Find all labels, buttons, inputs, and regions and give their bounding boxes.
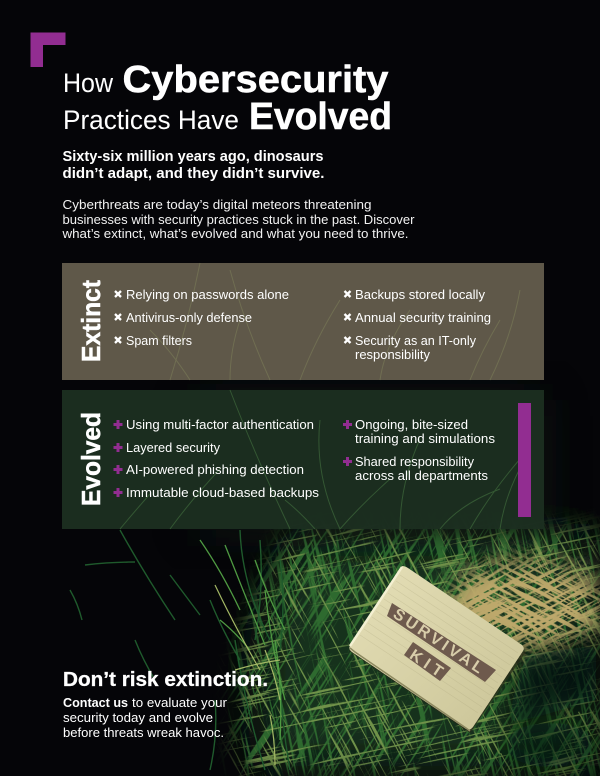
subheading: Sixty-six million years ago, dinosaurs [62,149,324,165]
list: evolved practices, right column [343,418,495,483]
intro paragraph: Cyberthreats are today’s digital meteors threatening [62,197,372,212]
list: extinct practices, left column: Antivirus-only defense [126,311,252,325]
background: night grass photograph [70,505,600,776]
purple accent bar [518,403,531,517]
illustration: survival kit box [349,566,526,733]
list: extinct practices, right column [344,288,491,362]
grass blades: mid green [200,540,285,740]
list: evolved practices, right column: Shared responsibility [355,455,475,469]
list: extinct practices, left column: Spam filters [126,334,192,348]
title: Practices Have [63,105,239,135]
list: extinct practices, right column: Security as an IT-only [355,334,477,348]
heading: Evolved: Evolved [76,412,106,506]
subheading [62,149,324,182]
subheading: didn’t adapt, and they didn’t survive. [62,166,324,182]
list: extinct practices, left column: Relying on passwords alone [126,288,289,302]
list: extinct practices, left column [115,288,289,348]
headline: don't risk extinction: Don’t risk extinction. [63,669,268,691]
contact text: security today and evolve [63,710,213,725]
contact text: to evaluate your [132,695,228,710]
intro paragraph [61,197,415,241]
grass blades: dark green [70,530,290,770]
list: evolved practices, left column [114,418,319,500]
title: Cybersecurity [122,59,388,101]
label: SURVIVAL: SURVIVAL [390,606,486,677]
contact text: before threats wreak havoc. [63,725,224,740]
title: Evolved [249,96,392,138]
list: evolved practices, right column: across all departments [355,469,488,483]
panel: extinct [62,263,544,380]
title [63,59,392,138]
list: evolved practices, right column: Ongoing, bite-sized [355,418,468,432]
title: How [63,68,113,98]
panel: evolved [62,390,544,529]
heading: Extinct: Extinct [76,280,106,362]
corner bracket [30,32,66,67]
list: evolved practices, right column: training and simulations [355,432,495,446]
intro paragraph: businesses with security practices stuck in the past. Discover [62,212,415,227]
grass blades: yellow-green highlights [215,585,280,765]
list: extinct practices, right column: Backups stored locally [355,288,486,302]
list: extinct practices, right column: Annual security training [355,311,491,325]
intro paragraph: what’s extinct, what’s evolved and what you need to thrive. [61,226,408,241]
contact text [63,695,228,740]
list: evolved practices, left column: AI-powered phishing detection [126,463,304,477]
list: evolved practices, left column: Immutable cloud-based backups [126,486,319,500]
contact text: Contact us [63,695,128,710]
list: evolved practices, left column: Layered security [126,441,221,455]
label: KIT: KIT [406,647,446,681]
closing call to action [63,669,268,740]
list: evolved practices, left column: Using multi-factor authentication [126,418,314,432]
list: extinct practices, right column: responsibility [355,348,431,362]
